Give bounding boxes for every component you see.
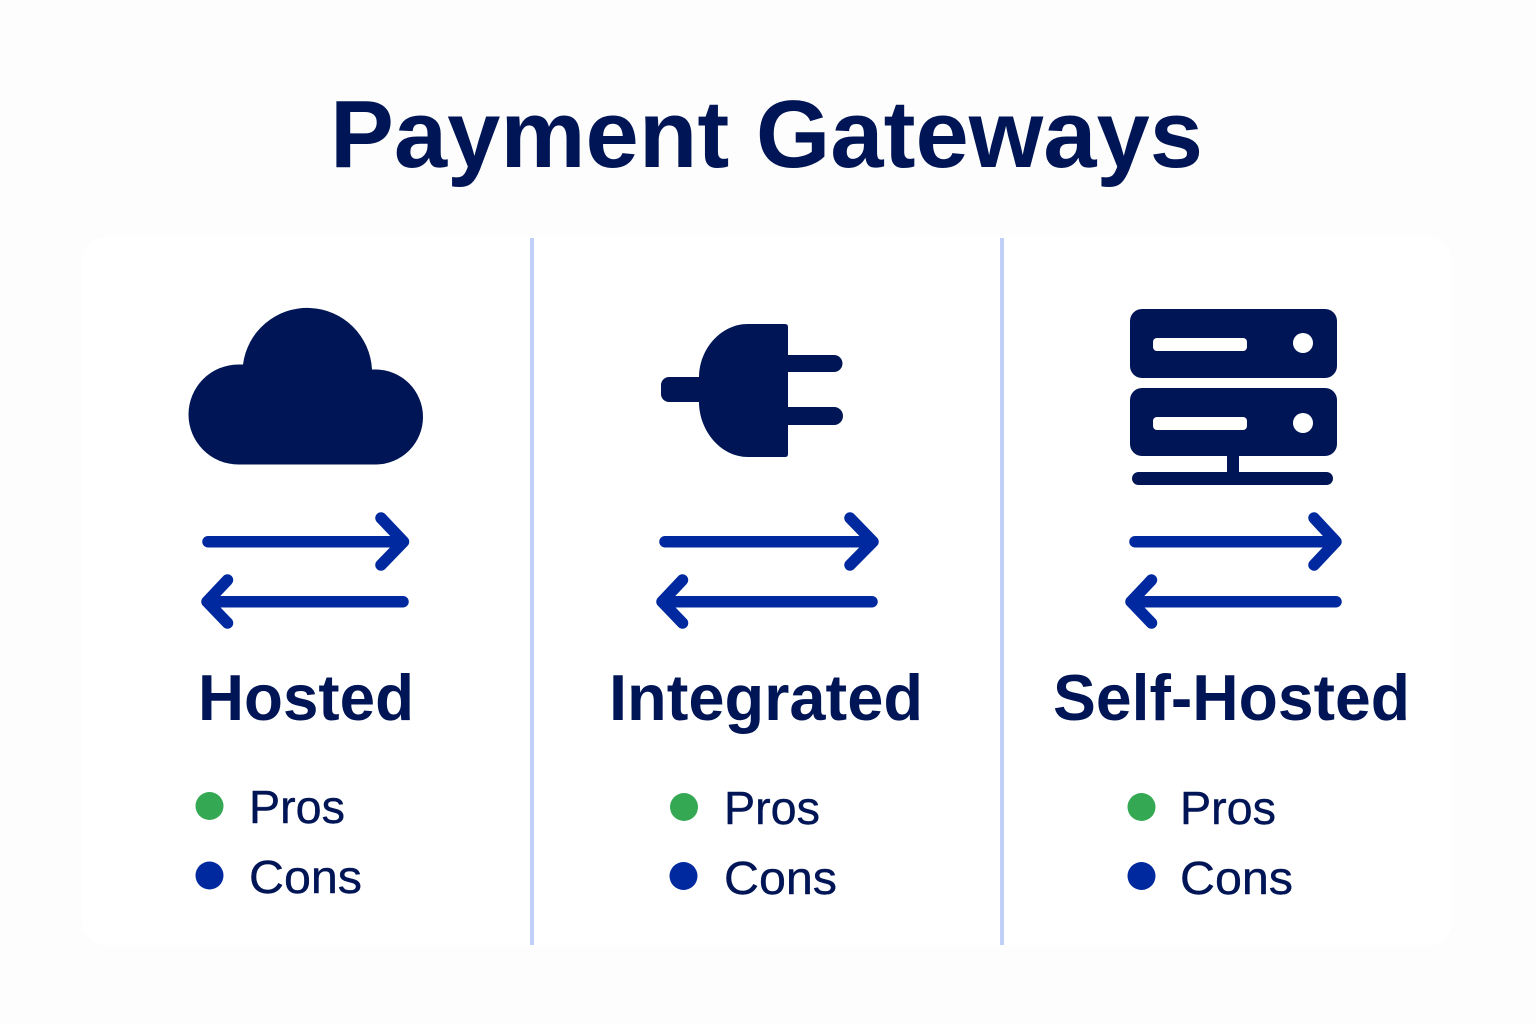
legend: pros (1128, 782, 1276, 834)
legend: cons (670, 852, 837, 904)
panel: Integrated (609, 324, 923, 904)
icon: plug (661, 324, 843, 457)
heading: Hosted: Hosted (198, 661, 414, 734)
panel: main card (82, 237, 1452, 945)
icon: cloud (188, 308, 423, 465)
legend: cons (196, 851, 362, 903)
legend: cons: Cons (1180, 852, 1293, 904)
heading: Integrated: Integrated (609, 661, 923, 734)
legend: pros: Pros (249, 781, 345, 833)
legend: cons (1128, 852, 1293, 904)
icon: server (1130, 309, 1337, 485)
legend: cons: Cons (249, 851, 362, 903)
arrows: two-way exchange (1131, 518, 1336, 623)
arrows: two-way exchange (662, 518, 873, 623)
title: Payment Gateways (330, 81, 1203, 188)
legend: pros (670, 782, 820, 834)
legend: pros (196, 781, 345, 833)
legend: cons: Cons (724, 852, 837, 904)
legend: pros: Pros (724, 782, 820, 834)
panel: Hosted (188, 308, 423, 903)
panel: Self-Hosted (1053, 309, 1410, 904)
heading: Self-Hosted: Self-Hosted (1053, 661, 1410, 734)
legend: pros: Pros (1180, 782, 1276, 834)
arrows: two-way exchange (207, 518, 404, 623)
